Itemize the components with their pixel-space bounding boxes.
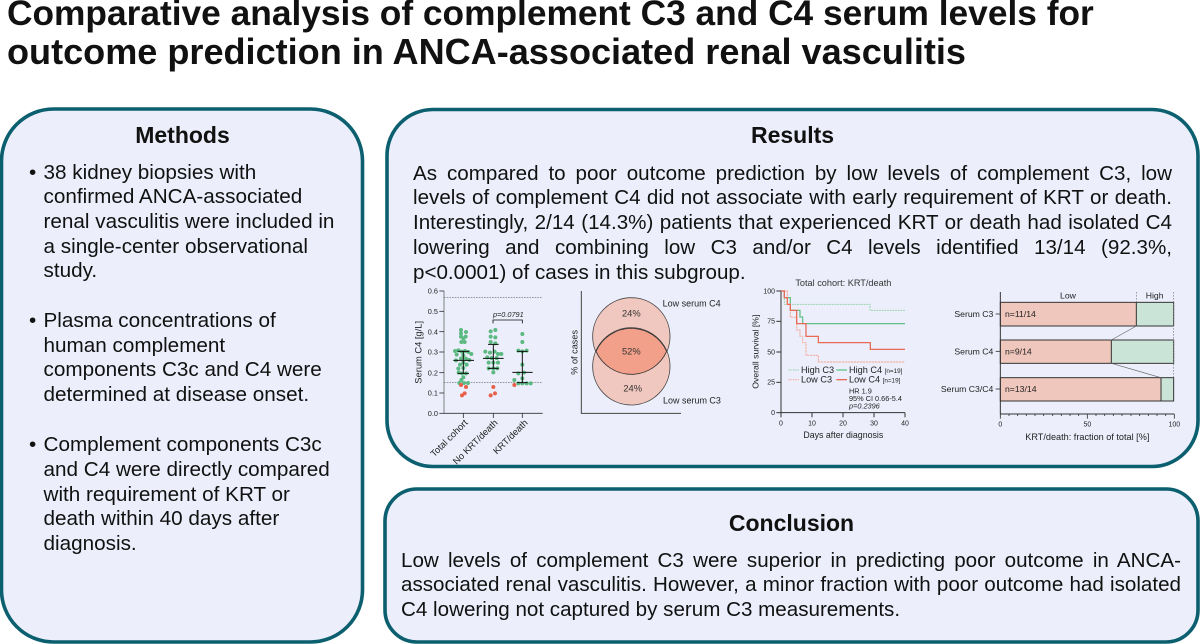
chart: serum C4 dot plot: Total cohort	[429, 417, 470, 459]
chart: survival curves: 40	[901, 421, 909, 428]
text block: methods bullet 1: renal vasculitis were included in	[44, 210, 334, 233]
text block: methods bullet 1: 38 kidney biopsies with	[44, 160, 256, 184]
text block: conclusion: Low levels of complement C3 were superior in predicting poor outcome in ANCA-	[401, 549, 1181, 572]
chart: venn diagram: Low serum C4	[663, 298, 721, 308]
chart: serum C4 dot plot: 0.3	[428, 348, 438, 357]
text block: methods bullet 2: •	[29, 309, 36, 332]
chart: serum C4 dot plot	[413, 287, 543, 466]
chart: stacked fraction bars: Serum C3/C4	[941, 384, 994, 394]
chart: serum C4 dot plot: Serum C4 [g/L]	[413, 321, 423, 384]
text block: results: levels of complement C4 did not associate with early requirement of KRT or death.	[413, 186, 1172, 209]
chart: stacked fraction bars: 100	[1169, 422, 1180, 429]
heading: conclusion: Conclusion	[729, 510, 854, 536]
text block: methods bullet 3: •	[29, 433, 36, 456]
chart: serum C4 dot plot: 0.2	[428, 368, 438, 377]
title: outcome prediction in ANCA-associated renal vasculitis	[7, 31, 966, 72]
heading: methods: Methods	[135, 122, 230, 148]
chart: stacked fraction bars: n=9/14	[1005, 346, 1032, 356]
chart: survival curves: 0	[771, 410, 775, 417]
text block: methods bullet 1: •	[29, 160, 36, 184]
panel: conclusion	[385, 489, 1198, 642]
chart: stacked fraction bars	[941, 291, 1180, 442]
chart: survival curves: 75	[767, 319, 775, 326]
text block: methods bullet 3: death within 40 days after	[44, 507, 279, 530]
chart: survival curves: 25	[767, 380, 775, 387]
chart: survival curves: p=0.2396	[848, 402, 881, 411]
chart: venn diagram: 52%	[622, 347, 641, 357]
text block: methods bullet 1	[29, 160, 334, 282]
chart: serum C4 dot plot: 0.4	[428, 327, 438, 336]
chart: survival curves: 0	[779, 421, 783, 428]
chart: survival curves: High C3	[801, 365, 834, 375]
chart: stacked fraction bars: Serum C3	[954, 309, 994, 319]
chart: serum C4 dot plot: KRT/death	[491, 418, 530, 456]
chart: serum C4 dot plot: 0.5	[428, 307, 438, 316]
chart: serum C4 dot plot: 0.6	[428, 287, 438, 296]
chart: venn diagram: Low serum C3	[663, 395, 721, 405]
chart: stacked fraction bars: Serum C4	[954, 346, 994, 356]
chart: stacked fraction bars: High	[1146, 291, 1164, 301]
text block: methods bullet 3	[29, 433, 330, 555]
chart: stacked fraction bars: 0	[998, 422, 1002, 429]
chart: survival curves: 10	[808, 421, 816, 428]
text block: methods bullet 3: and C4 were directly compared	[44, 458, 330, 481]
text block: methods bullet 3: diagnosis.	[44, 532, 137, 555]
text block: results: As compared to poor outcome prediction by low levels of complement C3, low	[413, 162, 1172, 184]
text block: methods bullet 2: determined at disease onset.	[44, 383, 309, 406]
chart: survival curves	[751, 278, 909, 440]
heading: results: Results	[751, 122, 834, 148]
text block: methods bullet 3: Complement components C3c	[44, 433, 322, 456]
chart: survival curves: Low C3	[801, 375, 832, 385]
chart: venn diagram: % of cases	[570, 330, 580, 375]
chart: serum C4 dot plot: 0.0	[428, 409, 438, 418]
text block: methods bullet 2: human complement	[44, 334, 225, 356]
text block: results: Interestingly, 2/14 (14.3%) patients that experienced KRT or death had isolated C4	[413, 211, 1172, 234]
chart: survival curves: Days after diagnosis	[803, 430, 884, 440]
chart: stacked fraction bars: KRT/death: fraction of total [%]	[1025, 432, 1149, 442]
text block: methods bullet 3: with requirement of KRT or	[44, 483, 290, 506]
chart: survival curves: 20	[839, 421, 847, 428]
chart: survival curves: HR 1.9	[849, 386, 872, 395]
text block: methods bullet 2: components C3c and C4 were	[44, 358, 322, 381]
text block: conclusion	[401, 549, 1181, 621]
chart: survival curves: 30	[870, 421, 878, 428]
chart: survival curves: Low C4 [n=19]	[849, 375, 901, 385]
chart: stacked fraction bars: Low	[1060, 291, 1077, 301]
chart: survival curves: Total cohort: KRT/death	[795, 278, 891, 288]
chart: stacked fraction bars: 50	[1083, 422, 1091, 429]
chart: survival curves: Overall survival [%]	[751, 315, 761, 389]
chart: stacked fraction bars: n=13/14	[1005, 384, 1037, 394]
text block: methods bullet 1: a single-center observational	[44, 235, 308, 258]
text block: results	[413, 162, 1172, 284]
chart: venn diagram	[570, 291, 721, 413]
chart: survival curves: 50	[767, 349, 775, 356]
text block: conclusion: C4 lowering not captured by serum C3 measurements.	[401, 598, 900, 621]
chart: serum C4 dot plot: No KRT/death	[451, 418, 500, 466]
text block: conclusion: associated renal vasculitis. However, a minor fraction with poor outcome had isolated	[401, 573, 1181, 596]
chart: survival curves: 100	[763, 288, 775, 295]
text block: methods bullet 1: study.	[44, 259, 97, 282]
chart: venn diagram: 24%	[623, 384, 642, 394]
panel: methods	[2, 109, 362, 642]
chart: survival curves: High C4 [n=19]	[849, 365, 903, 375]
chart: serum C4 dot plot: 0.1	[428, 389, 438, 398]
text block: methods bullet 2	[29, 309, 322, 406]
chart: serum C4 dot plot: p=0.0791	[492, 310, 524, 319]
title	[7, 0, 1094, 72]
panel: results	[387, 110, 1198, 466]
chart: survival curves: 95% CI 0.66-5.4	[849, 394, 902, 403]
text block: methods bullet 1: confirmed ANCA-associated	[44, 185, 302, 208]
text block: methods bullet 2: Plasma concentrations of	[44, 309, 276, 332]
text block: results: p<0.0001) of cases in this subgroup.	[413, 261, 746, 284]
chart: venn diagram: 24%	[622, 309, 641, 319]
text block: results: lowering and combining low C3 and/or C4 levels identified 13/14 (92.3%,	[413, 236, 1172, 259]
chart: stacked fraction bars: n=11/14	[1005, 309, 1036, 319]
